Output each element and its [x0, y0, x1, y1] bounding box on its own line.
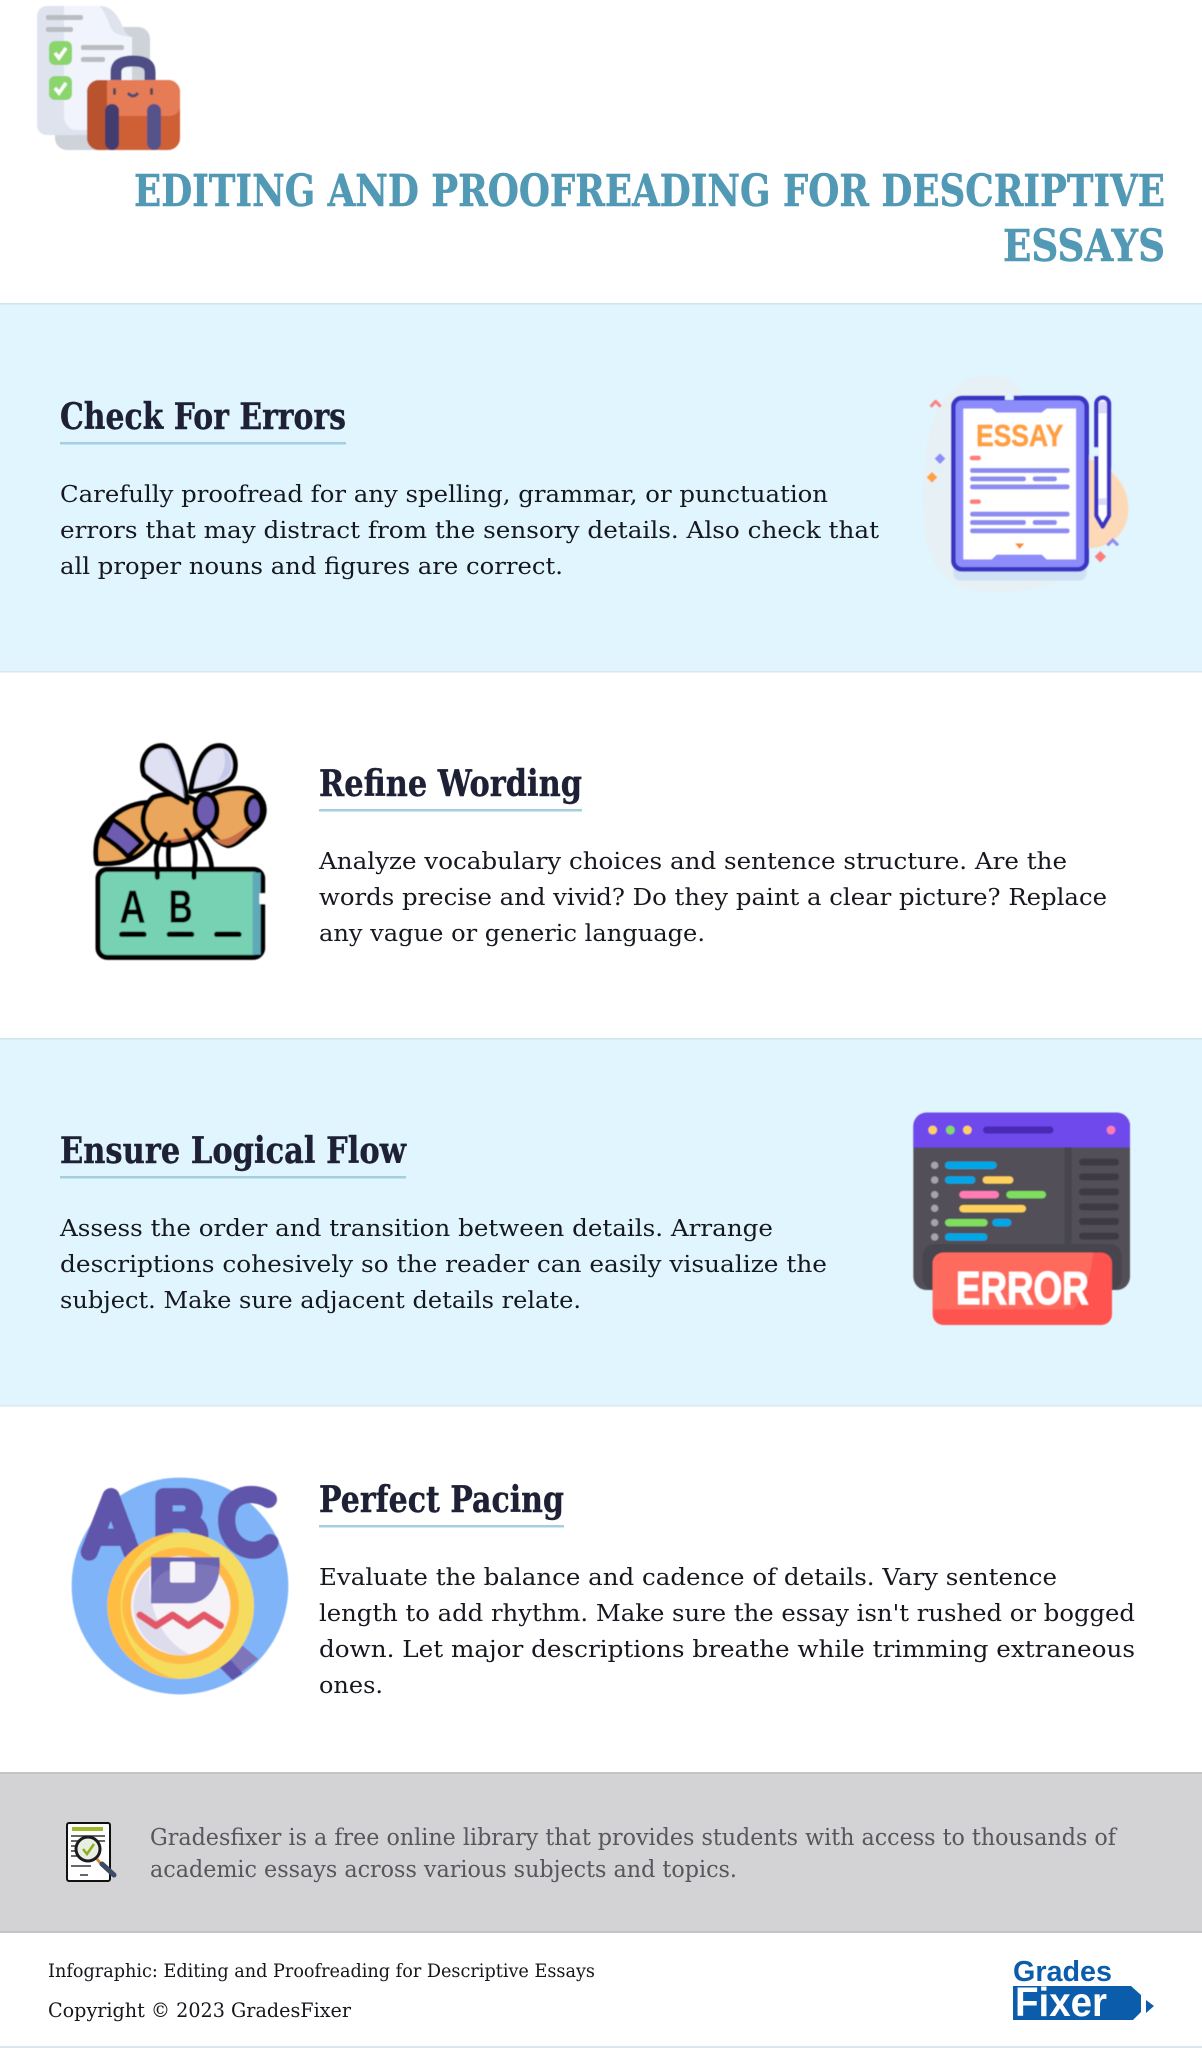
icon: document with magnifier — [67, 1823, 114, 1881]
heading: refine wording: Refine Wording — [319, 763, 582, 805]
panel: about gradesfixer — [0, 1772, 1202, 1933]
icon: bee on AB card: B — [169, 881, 193, 933]
heading: perfect pacing: Perfect Pacing — [319, 1479, 564, 1521]
text: about gradesfixer — [150, 1825, 1117, 1883]
header — [37, 6, 1165, 272]
text: refine wording: any vague or generic language. — [319, 921, 705, 947]
text: ensure logical flow: Assess the order and transition between details. Arrange — [59, 1216, 773, 1242]
text: perfect pacing: ones. — [319, 1673, 383, 1699]
icon: essay tablet: ESSAY — [976, 419, 1063, 453]
text: ensure logical flow — [59, 1216, 827, 1314]
text: about gradesfixer: academic essays across various subjects and topics. — [150, 1857, 737, 1883]
footer credits: Infographic: Editing and Proofreading for Descriptive Essays — [48, 1960, 595, 1982]
title — [134, 166, 1165, 272]
icon: ABC magnifier — [72, 1478, 288, 1694]
text: perfect pacing: length to add rhythm. Make sure the essay isn't rushed or bogged — [319, 1601, 1135, 1627]
panel: ensure logical flow — [0, 1038, 1202, 1406]
panel: check for errors — [0, 303, 1202, 672]
text: perfect pacing: down. Let major descriptions breathe while trimming extraneous — [319, 1637, 1135, 1663]
text: about gradesfixer: Gradesfixer is a free online library that provides students with access to thousands of — [150, 1825, 1117, 1851]
text: refine wording: words precise and vivid? Do they paint a clear picture? Replace — [319, 885, 1107, 911]
text: ensure logical flow: descriptions cohesively so the reader can easily visualize the — [60, 1252, 827, 1278]
text: perfect pacing — [319, 1565, 1135, 1699]
icon: bee on AB card — [96, 746, 267, 957]
footer credits — [48, 1960, 595, 2022]
logo: gradesfixer — [1013, 1956, 1154, 2025]
text: check for errors: Carefully proofread for any spelling, grammar, or punctuation — [60, 482, 828, 508]
logo: gradesfixer: Fixer — [1015, 1979, 1107, 2025]
text: ensure logical flow: subject. Make sure adjacent details relate. — [60, 1288, 581, 1314]
title: ESSAYS — [1003, 221, 1165, 272]
text: check for errors: errors that may distract from the sensory details. Also check that — [60, 518, 880, 544]
logo: gradesfixer: Grades — [1013, 1956, 1112, 1988]
text: perfect pacing: Evaluate the balance and cadence of details. Vary sentence — [319, 1565, 1057, 1591]
panel: refine wording — [96, 746, 1107, 957]
icon: essay tablet — [923, 376, 1128, 592]
icon: checklist and briefcase — [37, 6, 180, 150]
text: check for errors: all proper nouns and figures are correct. — [60, 554, 563, 580]
text: refine wording: Analyze vocabulary choices and sentence structure. Are the — [318, 849, 1067, 875]
text: check for errors — [60, 482, 880, 580]
panel: perfect pacing — [72, 1478, 1135, 1699]
icon: code window with error: ERROR — [956, 1262, 1089, 1314]
icon: code window with error — [913, 1113, 1130, 1325]
icon: bee on AB card: A — [120, 881, 146, 933]
footer credits: Copyright © 2023 GradesFixer — [48, 1998, 351, 2022]
heading: check for errors: Check For Errors — [60, 396, 346, 438]
heading: ensure logical flow: Ensure Logical Flow — [60, 1130, 407, 1172]
text: refine wording — [318, 849, 1107, 947]
footer — [0, 1956, 1202, 2048]
